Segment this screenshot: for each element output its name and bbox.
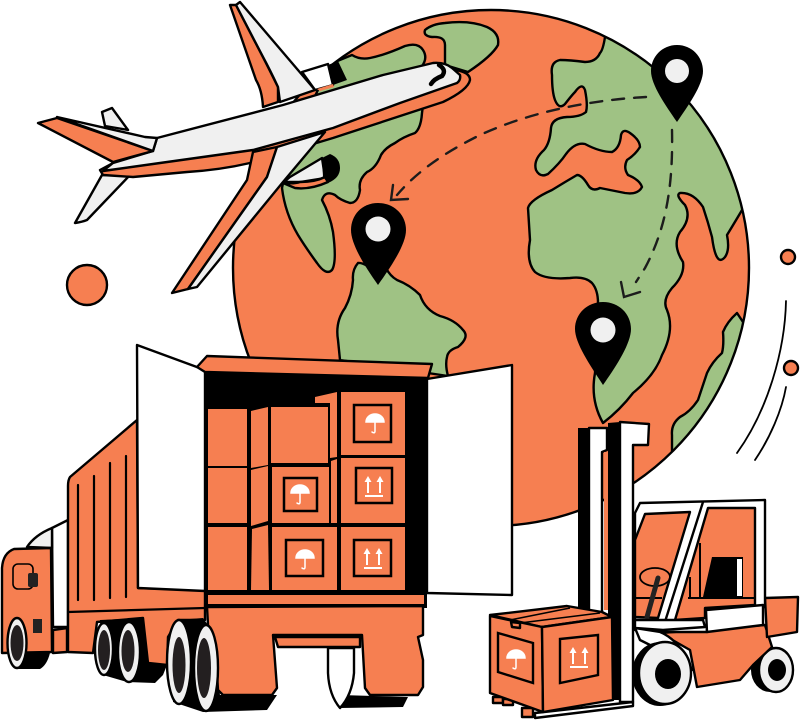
truck: rear wheel shadow	[173, 618, 277, 712]
truck	[2, 345, 512, 712]
box tab	[511, 622, 520, 628]
truck: cab light	[33, 619, 42, 633]
forklift: front wheel	[632, 642, 691, 706]
icon: umbrella	[296, 550, 314, 569]
decorative circle right top	[781, 250, 795, 264]
forklift: pallet feet	[493, 697, 533, 717]
icon: map pin top right	[651, 45, 703, 122]
motion lines	[737, 301, 786, 460]
truck: front wheel	[8, 618, 26, 668]
forklift: window detail lines	[635, 543, 755, 598]
continent: lower left	[337, 263, 466, 376]
truck: cab step	[53, 628, 67, 653]
plane: rudder	[102, 108, 128, 130]
truck: rear wheels	[167, 620, 218, 711]
truck: front wheel shadow	[10, 650, 50, 669]
box left face	[490, 616, 543, 712]
truck: right door	[427, 365, 512, 595]
box: blank upper	[271, 407, 328, 463]
box: umbrella top right	[341, 392, 405, 455]
continent: far right strip	[670, 312, 743, 452]
forklift: mast right	[608, 422, 649, 702]
truck: bumper bar	[275, 637, 360, 647]
plane: fuselage	[103, 63, 460, 171]
box: umbrella lower	[272, 527, 337, 590]
icon: umbrella	[291, 485, 309, 504]
icon: this way up	[570, 647, 588, 667]
box: arrows lower right	[341, 527, 405, 590]
decorative circle right bottom	[784, 361, 798, 375]
truck: trailer side	[68, 420, 205, 665]
truck: cab	[2, 548, 52, 653]
forklift: seat	[703, 557, 743, 597]
continent: top blob	[425, 22, 498, 72]
icon: this way up	[364, 476, 384, 496]
truck: roof	[197, 356, 432, 378]
truck: cab rear panel	[52, 520, 68, 627]
truck: trailer ribs	[68, 456, 205, 612]
forklift: carried box	[490, 606, 613, 712]
dashed route to left pin	[391, 97, 646, 200]
forklift: rear window	[675, 508, 755, 620]
box left label	[498, 633, 533, 683]
airplane	[38, 2, 470, 293]
continent: right landmass	[526, 37, 742, 424]
narrow column boxes	[251, 407, 269, 590]
forklift	[490, 422, 798, 718]
left column boxes	[208, 409, 247, 590]
truck: windshield	[27, 528, 52, 548]
box right label	[560, 635, 598, 683]
truck: middle wheels	[95, 618, 167, 683]
icon: map pin left	[351, 203, 406, 285]
plane: cockpit marks	[431, 65, 444, 84]
plane: lower engine	[283, 154, 340, 188]
icon: umbrella	[366, 414, 384, 433]
forklift: fork	[535, 702, 633, 718]
forklift: front fender	[635, 628, 692, 670]
truck: rear panel	[207, 606, 423, 695]
forklift: step panel	[706, 605, 763, 632]
plane: rear stabiliser	[75, 175, 130, 223]
continent: left asia	[282, 45, 425, 272]
globe	[233, 10, 760, 526]
truck: container interior	[205, 372, 427, 608]
icon: umbrella	[507, 650, 525, 669]
forklift: body	[660, 625, 772, 687]
truck: floor bar	[208, 595, 424, 604]
forklift: front window	[635, 512, 690, 618]
plane: top wing	[230, 2, 315, 107]
truck: mirror	[28, 573, 38, 587]
icon: map pin lower	[575, 302, 631, 385]
plane: belly	[100, 70, 470, 177]
forklift: counterweight	[765, 597, 798, 637]
plane: tail fin orange	[38, 118, 153, 162]
plane: top engine	[302, 61, 347, 91]
plane: tail fin white	[57, 117, 157, 151]
cargo boxes	[208, 392, 405, 590]
slivers	[315, 392, 337, 523]
box tape	[510, 608, 600, 623]
dashed route to lower pin	[621, 130, 672, 297]
box right face	[542, 617, 613, 712]
truck: right rear tyre and shadow	[328, 648, 408, 708]
forklift: steering wheel	[640, 568, 670, 617]
truck: left door	[137, 345, 205, 591]
forklift: windscreen line	[663, 502, 703, 628]
decorative circle left	[67, 265, 107, 305]
box top	[490, 606, 612, 627]
forklift: mast left	[578, 428, 608, 613]
plane: lower wing	[172, 132, 325, 293]
forklift: base strip	[635, 620, 705, 630]
icon: this way up	[364, 548, 382, 568]
box: umbrella middle	[272, 467, 329, 523]
box: arrows middle right	[341, 458, 405, 523]
forklift: rear wheel	[751, 648, 793, 692]
truck: cab window	[13, 564, 33, 589]
forklift: cab frame	[635, 500, 765, 632]
